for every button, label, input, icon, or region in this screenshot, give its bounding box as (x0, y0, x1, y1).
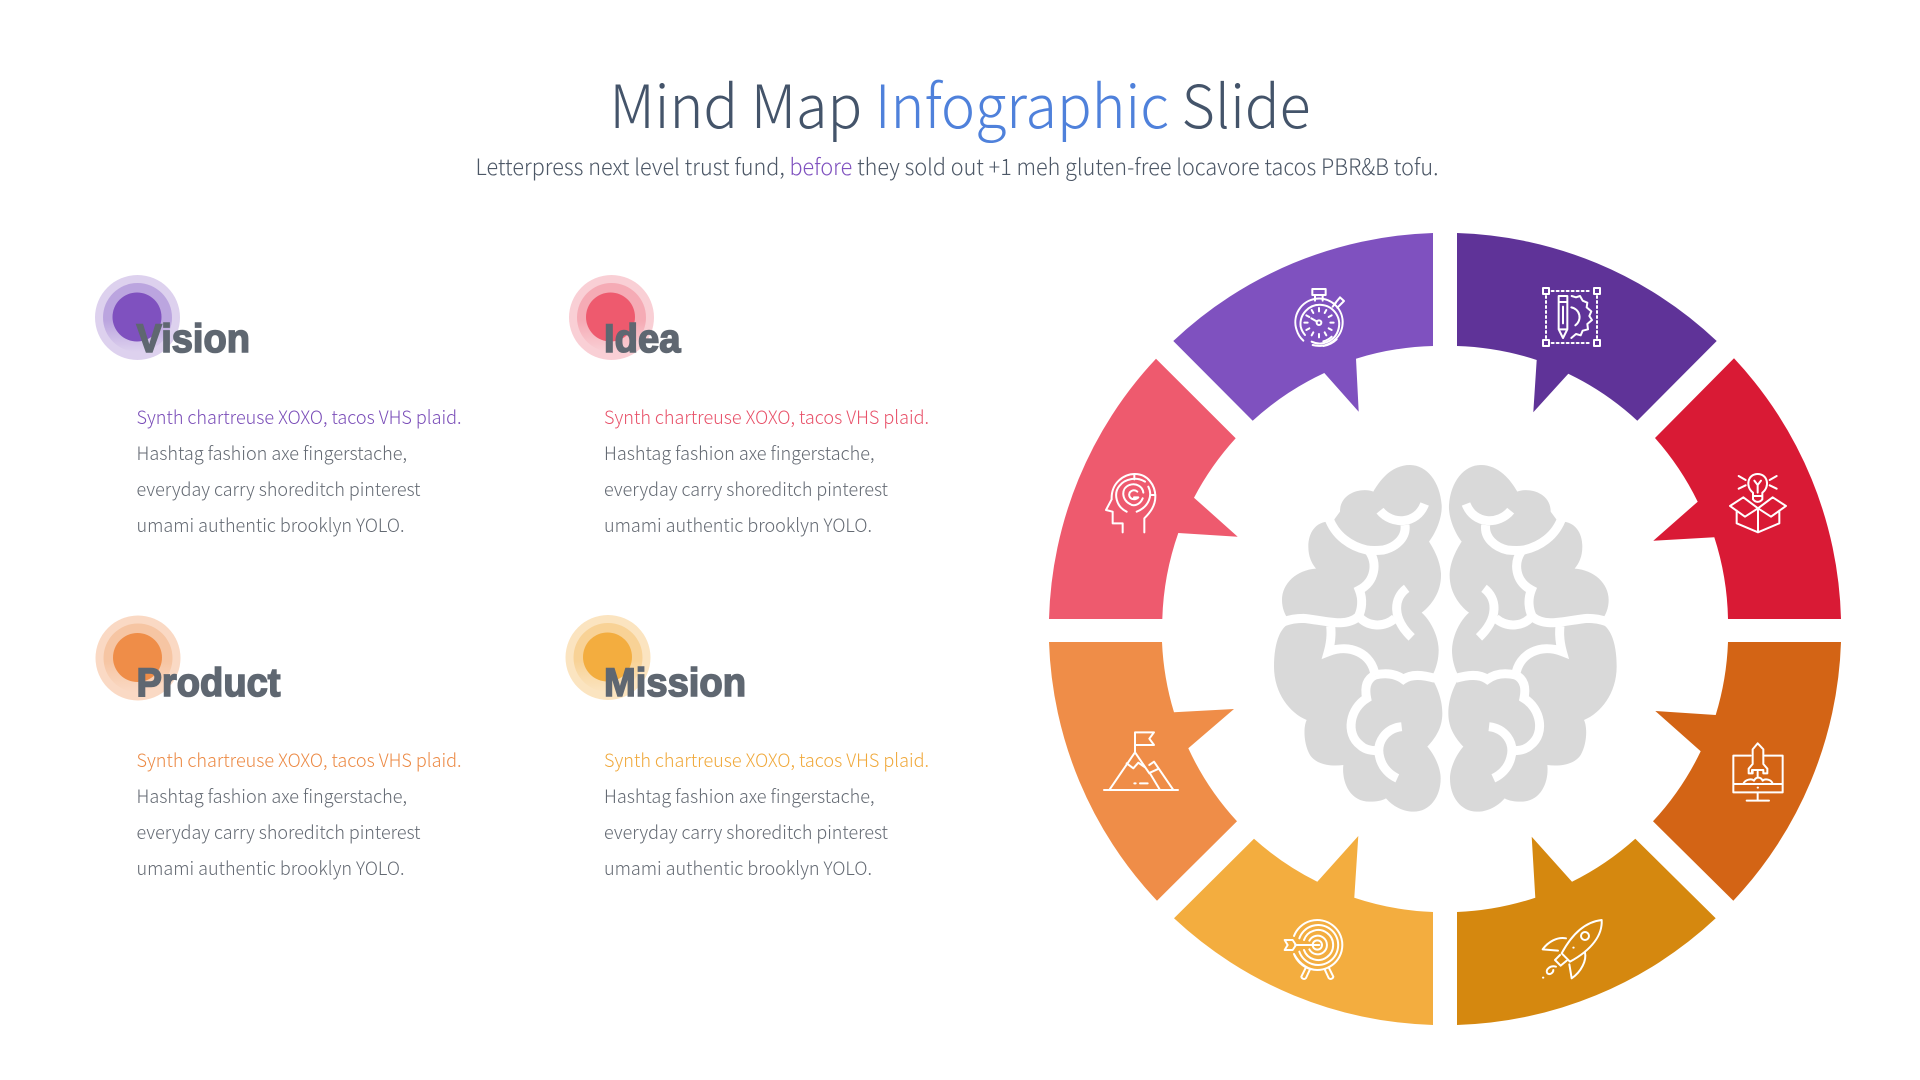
segment: pink maze head (1049, 359, 1238, 619)
segment: yellow target (1174, 836, 1433, 1025)
segment: red idea box (1653, 358, 1841, 619)
text block: product: Synth chartreuse XOXO, tacos VHS plaid. (136, 747, 462, 773)
text block: product: everyday carry shoreditch pinterest (136, 819, 421, 845)
segment: purple stopwatch (1173, 233, 1433, 421)
brain (1274, 465, 1617, 812)
text block: mission: Synth chartreuse XOXO, tacos VHS plaid. (604, 747, 929, 773)
text block: vision: umami authentic brooklyn YOLO. (136, 512, 404, 538)
heading: product: Product (136, 661, 280, 705)
segment: gold rocket (1457, 837, 1716, 1025)
icon: design gear and pencil (1543, 288, 1600, 346)
panel: vision (95, 275, 462, 538)
text block: idea: Synth chartreuse XOXO, tacos VHS plaid. (604, 404, 929, 430)
brain: left hemisphere (1274, 465, 1442, 812)
icon: light bulb in box (1730, 474, 1786, 532)
text block: vision: Hashtag fashion axe fingerstache, (136, 440, 407, 466)
bullet: product (96, 616, 180, 700)
panel: mission (566, 615, 929, 881)
text block: idea: everyday carry shoreditch pinterest (604, 476, 888, 502)
text block: product (136, 747, 462, 881)
text block: vision: everyday carry shoreditch pinterest (136, 476, 421, 502)
icon: head with maze (1106, 474, 1155, 532)
text block: product: umami authentic brooklyn YOLO. (136, 855, 404, 881)
icon: target with arrow (1285, 920, 1342, 979)
icon: monitor with rocket launch (1733, 743, 1783, 801)
icon: stopwatch (1295, 289, 1344, 346)
heading: idea: Idea (604, 317, 681, 361)
panel: product (96, 616, 462, 881)
heading: vision: Vision (136, 317, 250, 361)
panel: idea (569, 275, 929, 538)
icon: mountain with flag (1104, 732, 1178, 790)
bullet: mission (566, 615, 650, 700)
text block: mission: everyday carry shoreditch pinterest (604, 819, 888, 845)
title: Mind Map Infographic Slide (610, 60, 1310, 146)
text block: product: Hashtag fashion axe fingerstache, (136, 783, 407, 809)
text block: mission: umami authentic brooklyn YOLO. (604, 855, 872, 881)
segment: orange mountain (1049, 642, 1237, 901)
bullet: vision (95, 275, 180, 360)
text block: mission: Hashtag fashion axe fingerstache, (604, 783, 874, 809)
text block: idea (604, 404, 929, 538)
icon: rocket (1543, 920, 1602, 978)
text block: vision (136, 404, 462, 538)
brain: right hemisphere (1448, 465, 1617, 812)
text block: idea: umami authentic brooklyn YOLO. (604, 512, 872, 538)
segment: dark orange launch monitor (1653, 642, 1841, 901)
subtitle: Letterpress next level trust fund, before they sold out +1 meh gluten-free locavore tacos PBR&B tofu. (476, 150, 1438, 182)
text block: mission (604, 747, 929, 881)
heading: mission: Mission (604, 661, 746, 705)
text block: vision: Synth chartreuse XOXO, tacos VHS plaid. (136, 404, 462, 430)
text block: idea: Hashtag fashion axe fingerstache, (604, 440, 874, 466)
bullet: idea (569, 275, 654, 360)
segment: dark purple design (1457, 233, 1717, 421)
